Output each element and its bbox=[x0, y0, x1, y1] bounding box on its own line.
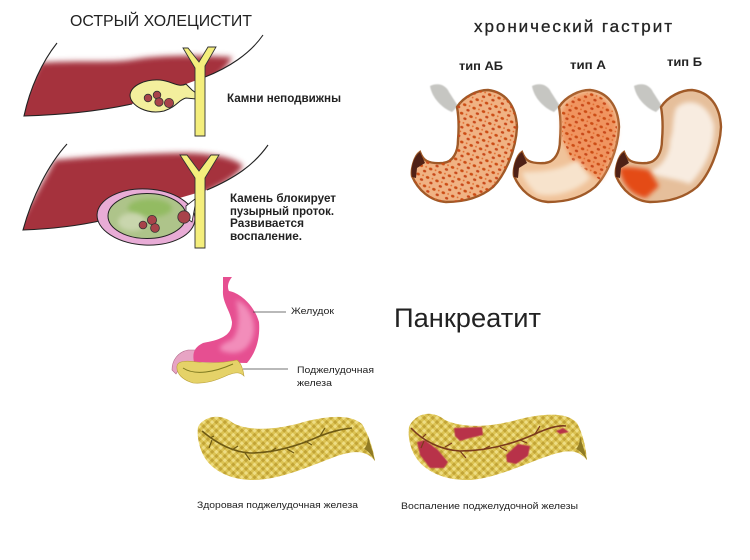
duodenum bbox=[172, 350, 200, 374]
gland body bbox=[409, 414, 587, 480]
lesions, upper body bbox=[562, 93, 617, 180]
caption: healthy pancreas: Здоровая поджелудочная железа bbox=[197, 500, 359, 511]
stones, lower bbox=[139, 211, 190, 232]
hook tip shading bbox=[576, 436, 587, 460]
pylorus bbox=[513, 152, 527, 178]
stomach, pink bbox=[193, 277, 259, 363]
liver outline, upper bbox=[24, 35, 263, 116]
liver outline, lower bbox=[23, 144, 268, 230]
diagram: stomach and pancreas bbox=[172, 277, 259, 383]
stomach body bbox=[514, 90, 619, 202]
gallbladder, upper bbox=[130, 80, 196, 112]
stomach: type A bbox=[513, 84, 619, 202]
caption: inflamed pancreas: Воспаление поджелудочной железы bbox=[401, 501, 578, 512]
diagram: gallbladder with blocked duct bbox=[10, 144, 268, 248]
text: stone blocks the cystic duct: Камень блокирует bbox=[230, 192, 336, 205]
healthy pancreas bbox=[198, 417, 375, 480]
stomach: type B bbox=[615, 84, 721, 202]
stones, upper bbox=[144, 91, 174, 108]
pancreatic duct bbox=[202, 428, 352, 460]
text: stone blocks the cystic duct: пузырный проток. bbox=[230, 205, 334, 218]
label: pancreas bbox=[297, 365, 374, 389]
text: stones immobile: Камни неподвижны bbox=[227, 92, 341, 105]
pancreas, small bbox=[177, 360, 244, 383]
leader line: stomach bbox=[253, 311, 286, 313]
stomach body bbox=[412, 90, 517, 202]
text: stone blocks the cystic duct bbox=[230, 192, 336, 243]
gland body bbox=[198, 417, 375, 480]
bile duct, upper bbox=[183, 47, 216, 136]
hook tip shading bbox=[364, 436, 375, 461]
lesions, antrum bbox=[619, 167, 659, 198]
pylorus bbox=[411, 152, 425, 178]
leader line: pancreas bbox=[243, 368, 288, 370]
label: type A: тип А bbox=[570, 60, 606, 72]
diagram: gallbladder with immobile stones bbox=[10, 35, 263, 136]
label: pancreas: Поджелудочная bbox=[297, 365, 374, 376]
label: type AB: тип АБ bbox=[459, 61, 503, 73]
esophagus bbox=[430, 84, 458, 112]
pale lower body bbox=[522, 160, 590, 195]
title: chronic gastritis: хронический гастрит bbox=[474, 17, 672, 36]
liver, upper bbox=[24, 50, 236, 116]
stomach body bbox=[616, 90, 721, 202]
pale mucosa bbox=[649, 102, 714, 184]
pancreatic duct bbox=[411, 426, 566, 458]
inflamed pancreas bbox=[409, 414, 587, 480]
pylorus bbox=[615, 152, 629, 178]
bile duct, lower bbox=[180, 155, 219, 248]
text: stone blocks the cystic duct: воспаление. bbox=[230, 230, 302, 243]
title: pancreatitis: Панкреатит bbox=[394, 303, 541, 333]
label: stomach: Желудок bbox=[291, 306, 335, 317]
stomach: type AB bbox=[411, 84, 517, 202]
text: stone blocks the cystic duct: Развивается bbox=[230, 217, 304, 230]
liver, lower bbox=[24, 148, 246, 230]
inflamed gallbladder wall bbox=[96, 186, 196, 248]
label: type B: тип Б bbox=[667, 57, 702, 69]
cystic duct bbox=[186, 199, 195, 222]
esophagus bbox=[634, 84, 662, 112]
inflamed patches bbox=[417, 427, 569, 468]
title: acute cholecystitis: ОСТРЫЙ ХОЛЕЦИСТИТ bbox=[70, 12, 253, 30]
label: pancreas: железа bbox=[297, 378, 333, 389]
inflamed gallbladder interior bbox=[108, 194, 186, 238]
esophagus bbox=[532, 84, 560, 112]
